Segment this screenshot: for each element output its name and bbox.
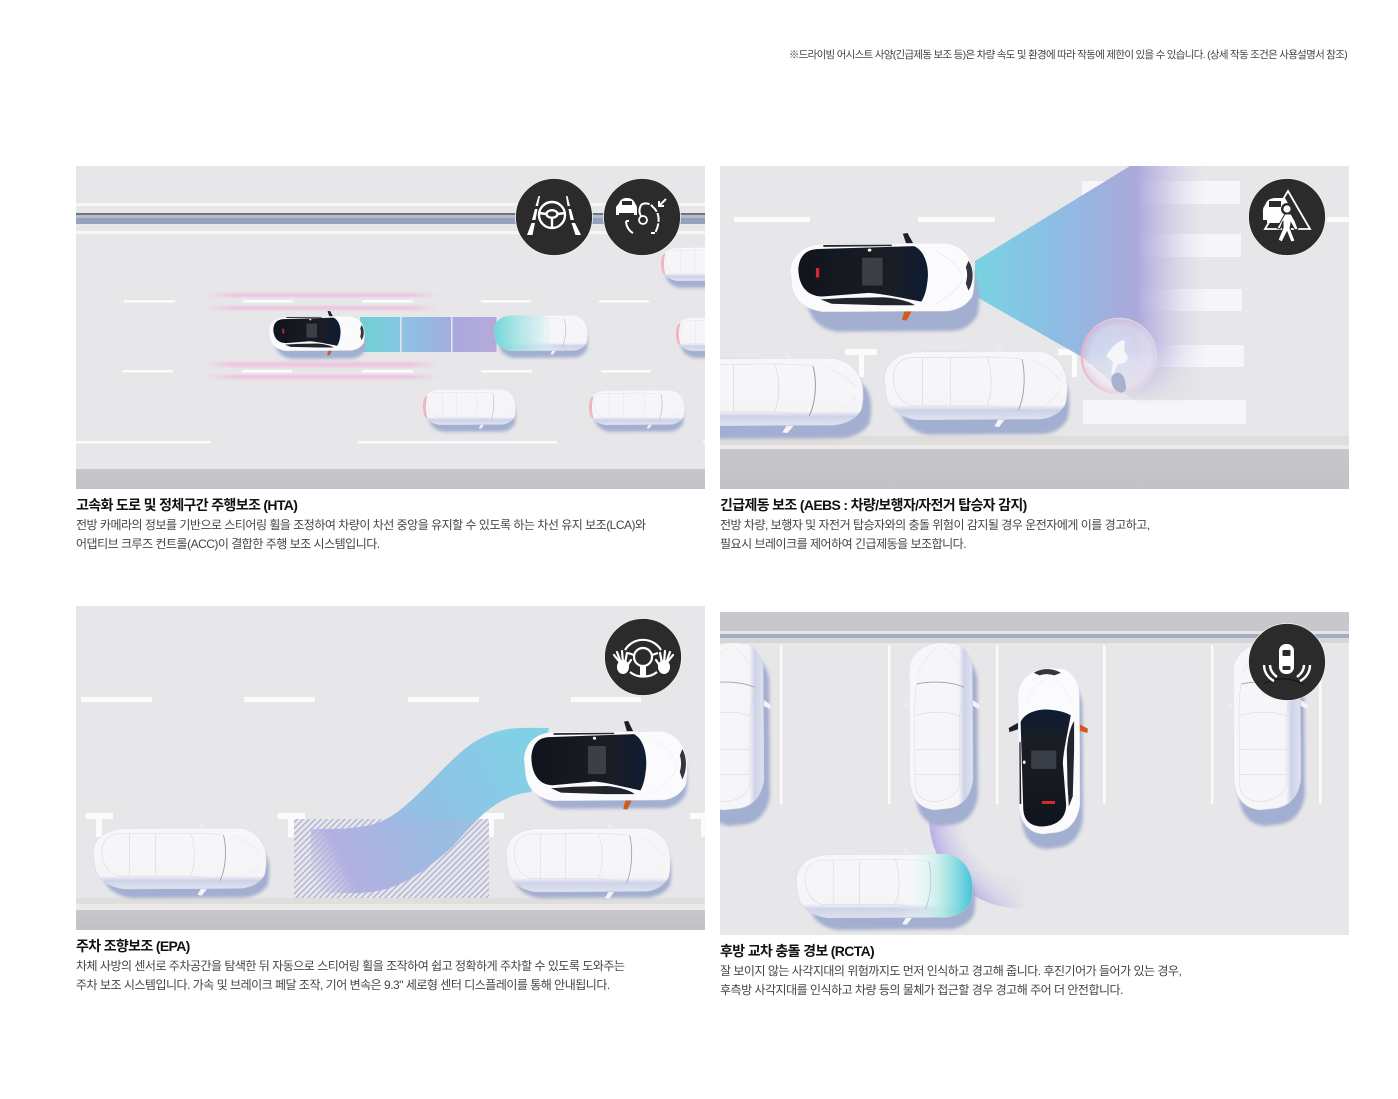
heading: HTA: 고속화 도로 및 정체구간 주행보조 (HTA) — [76, 497, 297, 513]
text block: HTA description: 어댑티브 크루즈 컨트롤(ACC)이 결합한 주행 보조 시스템입니다. — [76, 537, 380, 551]
ego car — [524, 721, 687, 810]
text block: AEBS description: 필요시 브레이크를 제어하여 긴급제동을 보조합니다. — [720, 537, 966, 551]
text block: RCTA description: 후측방 사각지대를 인식하고 차량 등의 물체가 접근할 경우 경고해 주어 더 안전합니다. — [720, 983, 1123, 997]
ego car — [790, 233, 979, 332]
text block: AEBS description — [720, 518, 1150, 551]
guard rail — [76, 203, 705, 234]
icon: hands off steering wheel — [604, 618, 682, 696]
parked cars — [692, 643, 1308, 826]
following distance gauge — [360, 317, 496, 352]
text block: HTA description: 전방 카메라의 정보를 기반으로 스티어링 휠을 조정하여 차량이 차선 중앙을 유지할 수 있도록 하는 차선 유지 보조(LCA)와 — [76, 518, 646, 532]
surrounding cars — [423, 244, 770, 432]
heading: RCTA: 후방 교차 충돌 경보 (RCTA) — [720, 943, 874, 959]
panel: AEBS crosswalk illustration — [720, 166, 1349, 489]
sensor cone — [975, 166, 1194, 401]
text block: AEBS description: 전방 차량, 보행자 및 자전거 탑승자와의 충돌 위험이 감지될 경우 운전자에게 이를 경고하고, — [720, 518, 1150, 532]
text block: HTA description — [76, 518, 646, 551]
parked cars — [660, 345, 1069, 439]
text block: EPA description: 주차 보조 시스템입니다. 가속 및 브레이크 페달 조작, 기어 변속은 9.3" 세로형 센터 디스플레이를 통해 안내됩니다. — [76, 978, 610, 992]
curb — [76, 898, 705, 930]
ego car — [269, 311, 366, 359]
lane markings — [76, 300, 705, 444]
ego car reversing — [1009, 668, 1088, 849]
road markings — [734, 217, 1349, 377]
text block: RCTA description — [720, 964, 1181, 997]
icon: rear cross traffic — [1248, 624, 1326, 700]
panel: RCTA parking lot illustration — [720, 612, 1349, 935]
text block: EPA description — [76, 959, 624, 992]
icon: adaptive cruise control — [604, 178, 680, 256]
cross traffic detection fan — [929, 821, 1018, 908]
lead car — [494, 312, 588, 358]
heading: EPA: 주차 조향보조 (EPA) — [76, 938, 190, 954]
wall and curb — [720, 612, 1349, 643]
pedestrian — [1106, 340, 1128, 393]
parking lines — [780, 645, 1322, 804]
icon: pedestrian warning — [1248, 178, 1326, 256]
panel: HTA highway illustration — [76, 166, 705, 489]
parking space hatch — [294, 819, 489, 898]
crosswalk stripes — [1082, 181, 1246, 424]
text block: EPA description: 차체 사방의 센서로 주차공간을 탐색한 뒤 자동으로 스티어링 휠을 조작하여 쉽고 정확하게 주차할 수 있도록 도와주는 — [76, 959, 624, 973]
footnote: ※드라이빙 어시스트 사양(긴급제동 보조 등)은 차량 속도 및 환경에 따라 작동에 제한이 있을 수 있습니다. (상세 작동 조건은 사용설명서 참조) — [789, 49, 1347, 61]
lane assist pink bands — [205, 293, 438, 379]
hands — [614, 651, 673, 666]
pedestrian detection bubble — [1081, 318, 1157, 394]
parking trajectory — [311, 728, 549, 893]
text block: RCTA description: 잘 보이지 않는 사각지대의 위험까지도 먼저 인식하고 경고해 줍니다. 후진기어가 들어가 있는 경우, — [720, 964, 1181, 978]
curb — [720, 436, 1349, 489]
parked cars — [93, 822, 671, 899]
panel: EPA parking illustration — [76, 606, 705, 930]
road markings — [81, 697, 705, 837]
approaching car — [796, 848, 975, 930]
heading: AEBS: 긴급제동 보조 (AEBS : 차량/보행자/자전거 탑승자 감지) — [720, 497, 1027, 513]
icon: lane keeping steering wheel — [516, 178, 592, 256]
